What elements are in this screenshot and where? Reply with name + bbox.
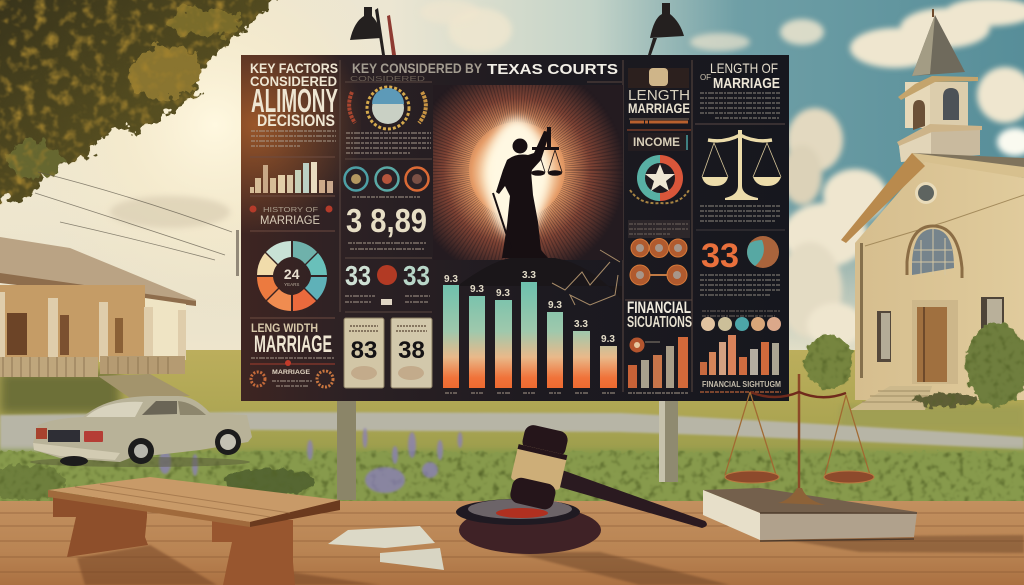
bar chart: central seven bars: 9.3 <box>548 300 562 311</box>
calendar card right: 38 <box>398 337 425 364</box>
caption: financial situations right column <box>700 380 781 392</box>
income label <box>628 133 688 151</box>
bar chart: third column <box>628 337 688 393</box>
heading: length of marriage right column: OF <box>700 73 711 82</box>
main heading: KEY CONSIDERED BY <box>352 61 482 76</box>
heading: length of marriage right column <box>695 60 785 124</box>
bar chart: central seven bars <box>443 270 617 393</box>
bar chart: central seven bars: 9.3 <box>496 288 510 299</box>
big statistic: 3 8,89 <box>346 202 427 239</box>
sunburst illustration <box>433 85 623 260</box>
panel: left title block: ALIMONY <box>251 82 338 119</box>
panel: left title block: DECISIONS <box>257 111 335 130</box>
heading: length marriage: MARRIAGE <box>254 331 332 358</box>
heading: history of marriage: MARRIAGE <box>260 213 320 227</box>
bar chart: left column <box>250 162 333 193</box>
calendar card left <box>344 318 384 388</box>
bench <box>48 477 340 585</box>
heading: financial situations third column: FINANCIAL <box>627 298 691 317</box>
billboard panel <box>241 55 789 401</box>
wreaths and small caption: MARRIAGE <box>272 370 310 376</box>
top picture: length marriage column <box>628 68 689 88</box>
heading: length of marriage right column: LENGTH OF <box>710 60 778 76</box>
icon row with bar chart <box>700 311 781 375</box>
ground: grass field and road <box>0 350 1024 505</box>
heading: history of marriage: HISTORY OF <box>263 207 318 214</box>
tree foliage <box>0 0 285 206</box>
gavel <box>456 423 707 554</box>
heading: length marriage third column <box>627 87 691 130</box>
heading: financial situations third column <box>627 298 692 331</box>
big statistic <box>346 197 427 249</box>
panel: left title block: KEY FACTORS <box>250 60 338 76</box>
house with porch <box>0 237 196 398</box>
wreaths and small caption <box>251 370 333 387</box>
main heading: CONSIDERED <box>350 76 425 83</box>
small ring badge: TEX <box>445 101 459 108</box>
bar chart: central seven bars: 9.3 <box>444 274 458 285</box>
main heading: TEXAS COURTS <box>487 61 618 78</box>
shrubs beside church <box>805 323 1024 407</box>
panel: left title block: CONSIDERED <box>250 73 337 89</box>
donut chart: YEARS <box>284 282 299 287</box>
stat pair with red emblem: 33 <box>345 260 371 291</box>
heading: length marriage: LENG WIDTH <box>251 321 318 335</box>
bushes in foreground grass <box>0 464 315 500</box>
panel: medallion network <box>628 220 690 285</box>
stat pair with red emblem <box>345 260 430 305</box>
wooden table <box>0 501 1024 585</box>
brass scale on book <box>725 374 874 505</box>
scattered papers <box>328 526 444 570</box>
heading: length of marriage right column: MARRIAGE <box>713 75 780 92</box>
bar chart: central seven bars: 9.3 <box>470 284 484 295</box>
heading: financial situations third column: SICUATIONS <box>627 314 692 331</box>
statistic with globe <box>696 230 785 295</box>
lady justice silhouette <box>493 127 562 258</box>
bar chart: central seven bars: 3.3 <box>574 319 588 330</box>
church <box>841 9 1024 410</box>
text block: right column <box>700 206 780 221</box>
calendar card left: 83 <box>351 337 377 364</box>
main heading <box>350 61 618 83</box>
three ring icons <box>344 168 428 190</box>
caption: financial situations right column: FINANCIAL SIGHTUGM <box>702 380 781 389</box>
small ring badge <box>440 91 464 115</box>
donut chart: 24 <box>284 266 300 282</box>
car <box>30 396 252 467</box>
billboard posts <box>337 400 678 500</box>
power lines and pole <box>35 172 239 276</box>
medal with laurels <box>349 87 426 129</box>
icon: cream balance scale <box>702 130 781 200</box>
heading: length marriage third column: MARRIAGE <box>628 100 690 116</box>
stat pair with red emblem: 33 <box>403 260 430 291</box>
text block: middle column <box>346 133 431 153</box>
heading: length marriage <box>250 321 335 366</box>
calendar card right <box>391 318 432 388</box>
heading: length marriage third column: LENGTH <box>628 87 690 104</box>
heading: history of marriage <box>250 206 335 231</box>
bar chart: central seven bars: 3.3 <box>522 270 536 281</box>
clouds <box>110 0 1024 347</box>
column divider lines <box>340 60 692 392</box>
stage base <box>460 258 622 300</box>
Texas map outline <box>552 250 620 305</box>
donut chart <box>250 241 335 318</box>
billboard lamps <box>350 3 684 55</box>
sky background <box>0 0 1024 400</box>
star donut <box>630 155 689 203</box>
income label: INCOME <box>633 135 680 149</box>
panel: left title block <box>250 60 338 196</box>
statistic with globe: 33 <box>701 237 739 275</box>
book <box>703 488 917 541</box>
bar chart: central seven bars: 9.3 <box>601 334 615 345</box>
lavender flowers <box>159 428 462 493</box>
